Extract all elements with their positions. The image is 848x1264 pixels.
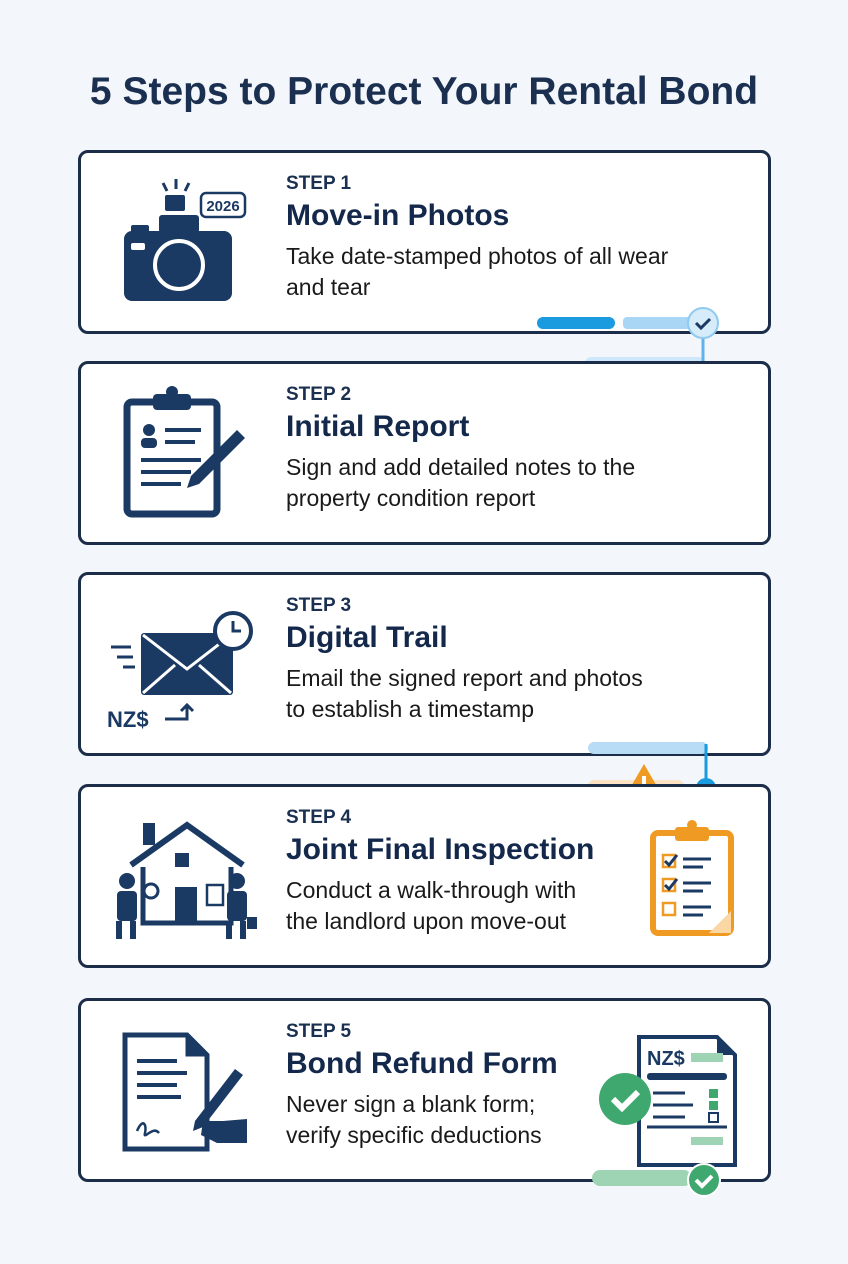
connector: check 1-2: [537, 307, 719, 361]
icon: camera: 2026: [206, 198, 240, 215]
icon: camera: [124, 179, 246, 301]
text: step 5: Never sign a blank form;: [286, 1091, 535, 1117]
icon: refund form with check: NZ$: [647, 1048, 685, 1070]
icon: refund form with check: [599, 1035, 737, 1167]
text: step 1: and tear: [286, 274, 370, 300]
panel: step 1: [78, 150, 771, 334]
text: step 4: the landlord upon move-out: [286, 908, 566, 934]
icon: signing form: [122, 1032, 247, 1152]
panel: step 5: [78, 998, 771, 1182]
panel: step 3: [78, 572, 771, 756]
text: step 1: STEP 1: [286, 173, 351, 194]
icon: orange checklist: [650, 820, 734, 936]
text: step 2: [286, 384, 635, 511]
text: step 2: property condition report: [286, 485, 535, 511]
text: step 2: Initial Report: [286, 410, 469, 443]
text: step 5: STEP 5: [286, 1021, 351, 1042]
text: step 5: [286, 1021, 558, 1148]
text: step 4: [286, 807, 594, 934]
icon: clipboard: [124, 386, 245, 518]
icon: house inspection: [116, 821, 257, 939]
text: step 4: Joint Final Inspection: [286, 833, 594, 866]
panel: step 2: [78, 361, 771, 545]
text: step 4: Conduct a walk-through with: [286, 877, 576, 903]
text: step 4: STEP 4: [286, 807, 351, 828]
text: step 5: verify specific deductions: [286, 1122, 542, 1148]
title: 5 Steps to Protect Your Rental Bond: [90, 70, 758, 113]
icon: email with clock: NZ$: [107, 707, 149, 732]
text: step 3: to establish a timestamp: [286, 696, 534, 722]
text: step 2: STEP 2: [286, 384, 351, 405]
text: step 2: Sign and add detailed notes to the: [286, 454, 635, 480]
text: step 1: [286, 173, 668, 300]
panel: step 4: [78, 784, 771, 968]
text: step 3: Digital Trail: [286, 621, 448, 654]
text: step 1: Move-in Photos: [286, 199, 509, 232]
text: step 3: [286, 595, 643, 722]
icon: email with clock: [107, 611, 253, 732]
connector: warning 3-4: [588, 742, 716, 784]
text: step 3: STEP 3: [286, 595, 351, 616]
badge: bottom check: [592, 1163, 721, 1197]
text: step 1: Take date-stamped photos of all wear: [286, 243, 668, 269]
text: step 5: Bond Refund Form: [286, 1047, 558, 1080]
text: step 3: Email the signed report and photos: [286, 665, 643, 691]
